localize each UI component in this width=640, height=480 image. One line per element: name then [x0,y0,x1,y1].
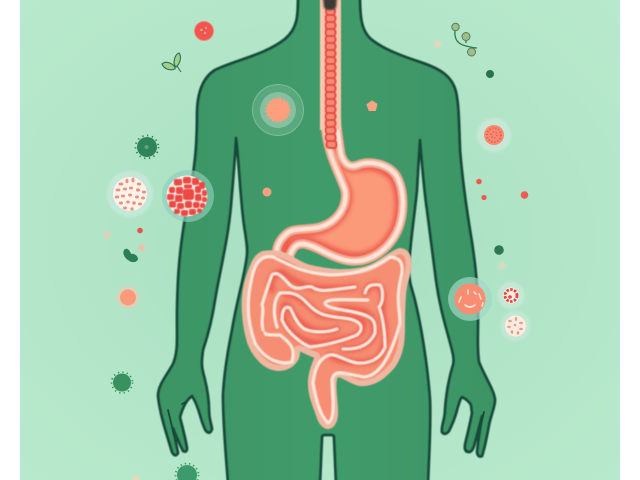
stomach [277,120,403,261]
icon: red dots right [476,179,528,200]
intestine red shadows [271,272,385,362]
small intestine coil [274,293,361,347]
microbe: green virus bottom [176,464,198,480]
microbe: pale pink cell left [107,171,153,217]
icon: red round cell [194,22,214,40]
icon: dark green dot upper right [486,70,494,78]
icon: leaf sprig left [162,53,181,72]
icon: curly sprig top right [452,23,477,56]
main colon wall [248,257,402,423]
icon: pale dot bottom [132,475,140,480]
microbe: green virus upper left [136,136,158,158]
inflamed spot on chest [252,84,304,136]
microbe: salmon glowing dot left [117,286,139,308]
ileum squiggle [262,274,355,330]
icon: small red dot left [137,228,143,233]
icon: salmon pentagon cell [367,101,377,110]
oesophagus tube [320,0,341,148]
intestine white walls [248,257,402,423]
arm creases and finger lines [168,402,484,435]
microbe: pale cell right [500,311,530,341]
icon: dark green dot right [494,245,504,255]
microbe: salmon cell right [477,118,511,152]
microbe: large red cell left [162,170,214,222]
icon: dark green bean [123,249,138,262]
icon: pale dots left [104,232,145,251]
human body silhouette [158,0,495,480]
microbe: green virus lower left [112,372,132,393]
icon: small salmon dot [262,188,272,196]
intestine outer silhouette [245,251,409,426]
icon: pale dot right [498,262,506,270]
digestive tract [245,0,409,426]
jejunum loop [325,300,375,349]
intestines [245,251,409,426]
mouth opening at top of oesophagus [323,0,337,10]
microbe: large salmon cell right [448,277,492,321]
stomach inner lining [288,150,395,252]
icon: pale dot top right [434,40,442,48]
oesophagus beads [326,8,336,148]
microbe: small red-white cell right [498,282,524,309]
